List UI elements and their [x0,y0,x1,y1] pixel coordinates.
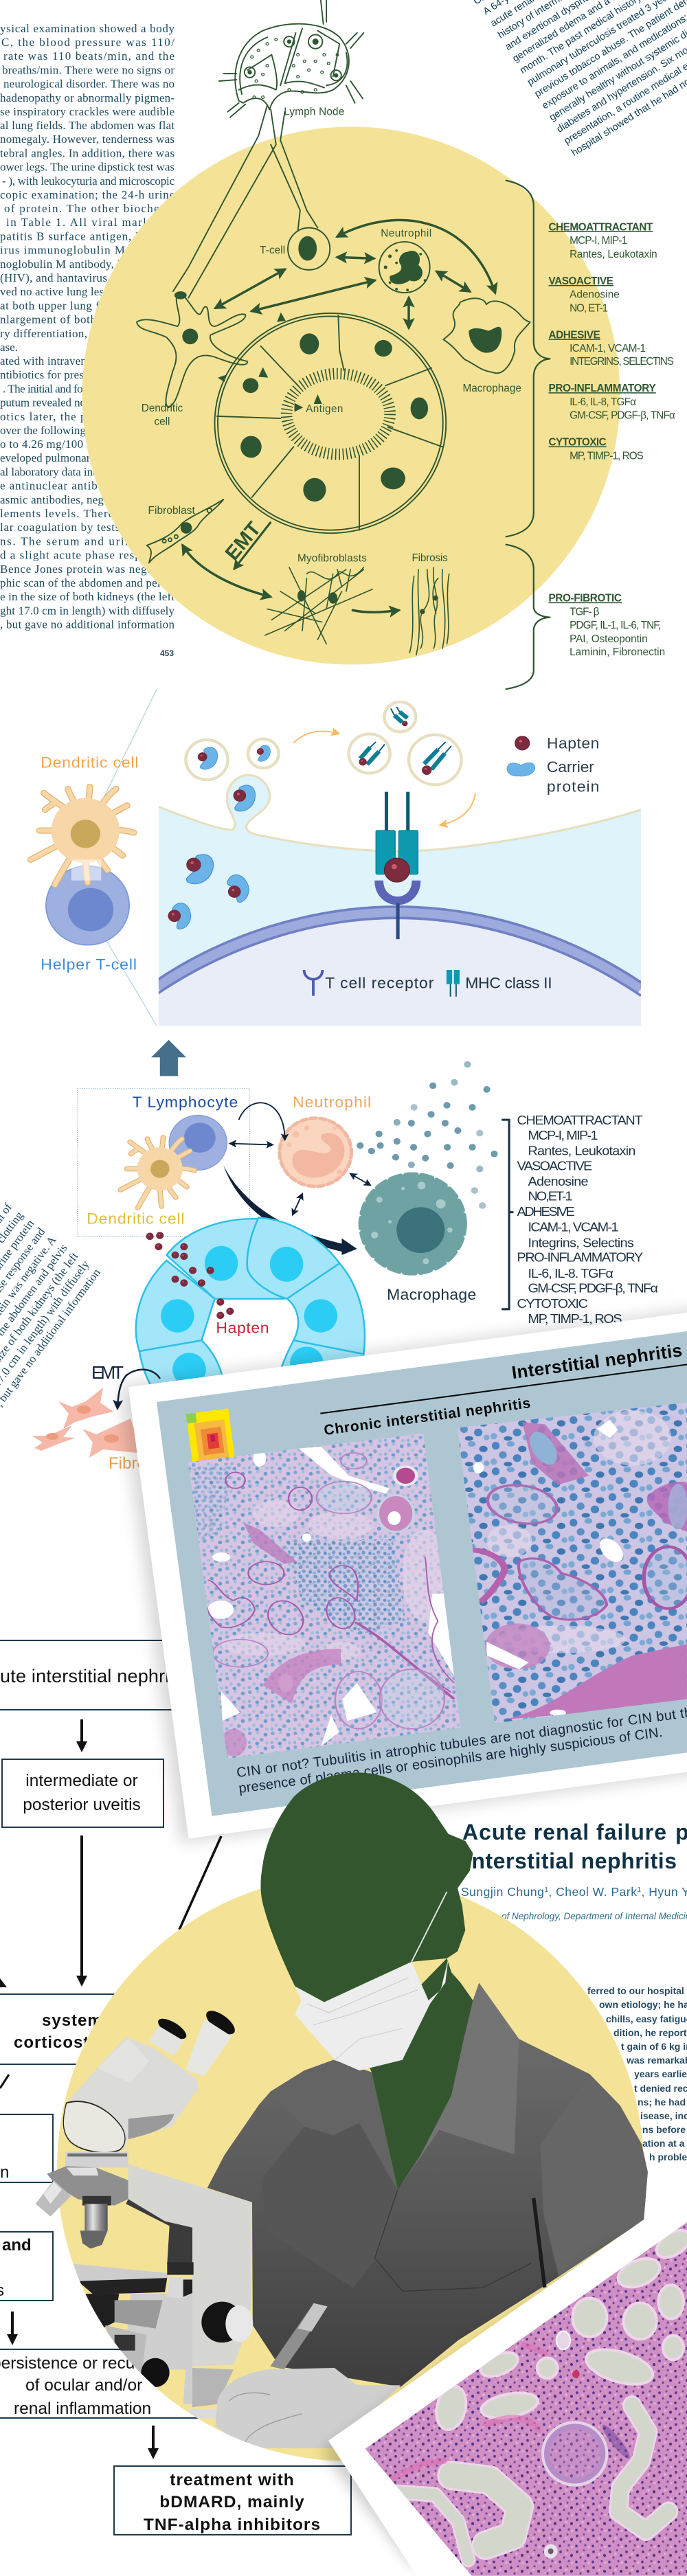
list: mediators [548,221,675,658]
white photo border [328,2189,687,2576]
list: mediators: Rantes, Leukotaxin [570,249,657,260]
flowchart: persistence or recurrence box: of ocular and/or [25,2376,142,2395]
text block: clinical case column, top left: ght 17.0 cm in length) with diffusely [0,605,174,617]
article: body text fragment: ns; he had [638,2097,686,2108]
text block: clinical case column, top left: ntibiotics for presumed [0,368,110,381]
head silhouette [260,1772,473,2002]
arrow: flow down 1 [76,1719,87,1752]
icon: microscope upper body [36,2006,328,2369]
icon: dendritic cell [137,291,247,407]
dense infiltrate [286,1539,405,1635]
diagram: hapten presentation panel [31,689,658,1403]
text block: clinical case column, top left: e in the size of both kidneys (the left [0,590,174,603]
bracket: mediators [502,1120,513,1309]
list: mediators: Adenosine [528,1175,589,1189]
article: body text fragment: ns before [642,2124,686,2135]
arrow: flow down 4 [148,2426,159,2459]
list: mediators: MCP-I, MIP-1 [528,1129,598,1143]
label and arrow: EMT: EMT [221,517,265,565]
heading underline [320,1362,687,1414]
yellow circle background, top diagram [82,126,620,665]
label: dendritic cell [142,403,183,428]
list: mediators: Rantes, Leukotaxin [528,1144,635,1158]
text block: clinical case column, top left: (HIV), and hantavirus [0,271,107,284]
list: mediators: TGF- β [570,606,600,618]
figure: lab worker [207,1772,648,2387]
legend: hapten and carrier protein: Carrier [547,759,594,776]
flowchart: intermediate or posterior uveitis box: intermediate or [25,1772,138,1790]
list: mediators: ADHESIVE [517,1206,575,1219]
icon: T lymphocyte [169,1115,227,1170]
text block: clinical case column, top left: al lung fields. The abdomen was flat [0,119,174,132]
icon: macrophage [361,1175,464,1273]
arrow: thick curved to macrophage [223,1166,357,1255]
eyepieces [149,2006,237,2076]
text block: clinical case column, top left: putum revealed no [0,396,86,409]
pen [270,2303,328,2369]
text block: clinical case column, top left: rate was 110 beats/min, and the [3,49,174,63]
text block: clinical case column, top left: otics later, the py [0,410,93,423]
page number: 453 [160,648,174,658]
label: hapten: Hapten [216,1320,269,1336]
list: mediators: Integrins, Selectins [528,1236,634,1250]
text block: clinical case column, top left: at both upper lung fields [0,300,124,312]
flowchart: persistence or recurrence box [0,2349,220,2418]
list: mediators: VASOACTIVE [548,275,613,287]
label: T lymphocyte: T Lymphocyte [133,1094,238,1111]
hand [215,2368,401,2448]
label: fibrosis: Fibrosis [412,552,448,564]
icon: microscope stage and base [74,2264,234,2419]
extracellular fluid [159,776,641,981]
flowchart: partial box with n: n [0,2163,9,2182]
T-cell membrane [157,912,641,988]
histology tissue [344,2211,687,2576]
text block: clinical case column, top left: neurological disorder. There was no [3,77,174,91]
label: dendritic cell small: Dendritic cell [87,1210,184,1227]
text block: clinical case column, top left: o to 4.26 mg/100 mL [0,438,103,451]
text block: clinical case column, top left [0,22,190,631]
text block: clinical case column, top left: lar coagulation by tests of [0,521,134,534]
flowchart: partial box with and: and [2,2236,32,2255]
flowchart: partial box with n [0,2114,53,2182]
text block: clinical case column, top left: eveloped pulmonary [0,451,96,464]
flowchart: systemic corticosteroids box [0,1994,206,2064]
article: title and authors: interstitial nephritis [465,1849,677,1873]
text block: clinical case column, top left: hadenopathy or abnormally pigmen- [0,91,174,104]
text block: clinical case column, top left: phic scan of the abdomen and pelvis [0,576,174,589]
list: mediators: INTEGRINS, SELECTINS [570,356,674,368]
curly brace: cytokine groups [506,181,550,536]
icon: renal tubule cross-section [215,313,446,533]
legend: T cell receptor and MHC class II [304,970,552,997]
flowchart: partial box with and [0,2232,53,2301]
text block: clinical case column, top left: breaths/min. There were no signs or [2,63,174,77]
arrows between cells [183,220,495,612]
small floating particles [357,1061,497,1209]
icon: lymph node [219,0,363,117]
zoom guide lines [72,689,157,1026]
arrow: flow down 2 [76,1835,87,1987]
list: mediators: IL-6, IL-8. TGFα [528,1267,613,1281]
text block: clinical case column, top left: ower legs. The urine dipstick test was [0,161,174,173]
text block: clinical case column, top left: , but gave no additional information [0,618,174,631]
article: title and authors: 1 [544,1886,548,1894]
list: mediators: NO, ET-1 [570,302,608,314]
text block: clinical case column, top left: nomegaly. However, tenderness was [0,133,174,146]
list: mediators: ICAM-1, VCAM-1 [528,1221,619,1234]
icon: helper T-cell [46,866,129,945]
list: mediators: PRO-INFLAMMATORY [548,383,656,394]
legend: hapten and carrier protein [507,735,599,795]
text block: clinical case column, top left: C, the blood pressure was 110/ [1,36,174,49]
MHC class II molecule [376,792,418,874]
list: mediators: MCP-I, MIP-1 [570,235,627,247]
dotted selection box [78,1089,250,1236]
text block: clinical case column, top left: - ), with leukocyturia and microscopic [2,174,174,188]
haptens near tubule [146,1232,234,1319]
vesicles [185,702,462,784]
label: EMT: EMT [91,1362,124,1383]
icon: macrophage [443,298,530,373]
histology image: left micrograph [188,1433,460,1759]
article: title and authors: Acute renal failure [462,1820,666,1844]
curly brace: pro-fibrotic [506,545,550,689]
text block: clinical case column, top left: of protein. The other biochemical [4,202,190,215]
membrane [159,775,641,851]
text block: clinical case column, top left: ns. The serum and urine [0,534,137,548]
label: dendritic cell: Dendritic [142,403,183,414]
list: mediators: PRO-INFLAMMATORY [517,1251,643,1265]
panel: kidney histology photograph [322,2189,687,2576]
list: mediators: PRO-FIBROTIC [548,593,622,605]
list: mediators: CYTOTOXIC [517,1297,588,1311]
heading: chronic interstitial nephritis: Chronic interstitial nephritis [323,1395,532,1438]
flowchart: intermediate or posterior uveitis box: posterior uveitis [23,1796,141,1814]
flowchart: treatment box: TNF-alpha inhibitors [144,2516,321,2534]
list: mediators: CYTOTOXIC [548,437,607,449]
slide shadow [120,1296,687,1842]
histology image: right micrograph [451,1399,687,1731]
text block: clinical case column, top left: Bence Jones protein was negative [0,563,172,576]
icon: neutrophil [280,1118,351,1186]
icon: heat-map legend [186,1408,236,1472]
text block: clinical case column, top left: . The initial and follow [3,382,103,396]
icon: fibroblasts [32,1388,137,1458]
icon: T-cell [288,228,330,270]
text block: clinical case column, top left: irus immunoglobulin M [0,243,125,257]
label: antigen: Antigen [306,403,343,415]
label: dendritic cell: cell [154,416,170,428]
slide background [157,1315,687,1816]
text block: clinical case column, top left: in Table 1. All viral markers [6,216,166,229]
label: fibroblast: Fibroblast [148,505,196,517]
list: mediators: PDGF, IL-1, IL-6, TNF, [570,620,661,631]
legend: hapten and carrier protein: Hapten [547,735,599,752]
flowchart: acute interstitial nephritis box [0,1640,188,1710]
flowchart: intermediate or posterior uveitis box [2,1759,164,1827]
text block: clinical case column, top left: ry differentiation, [0,327,87,340]
label: lymph node: Lymph Node [284,106,344,118]
text block: rotated case report, top right [472,0,687,160]
vesicle contents [198,707,451,775]
list: mediators: Laminin, Fibronectin [570,646,665,658]
icon: fibrosis [409,567,449,655]
article: body text fragment [587,1985,687,2162]
label: myofibroblasts: Myofibroblasts [297,553,367,565]
legend: T cell receptor and MHC class II: MHC class II [465,975,552,992]
list: mediators: MP, TIMP-1, ROS [570,450,644,462]
label: dendritic cell: Dendritic cell [41,754,139,771]
list: mediators: MP, TIMP-1, ROS [528,1312,622,1326]
text block: clinical case column, top left: over the following days [0,424,110,437]
arrow: diagonal line to circle [179,1836,221,1930]
icon: myofibroblasts [265,567,372,644]
article: title and authors: Sungjin Chung [461,1885,544,1899]
vessels between node and cells [173,105,317,298]
text block: clinical case column, top left: al laboratory data included [0,466,124,478]
list: mediators: GM-CSF, PDGF-β, TNFα [570,410,675,422]
hapten bound [385,858,409,882]
text block: clinical case column, top left: copic examination; the 24-h urine [0,188,174,201]
text block: clinical case column, top left: ved no active lung lesions [0,285,124,298]
slide card [128,1296,687,1838]
list: mediators: IL-6, IL-8, TGFα [570,396,636,408]
panel: interstitial nephritis slide [120,1294,687,1842]
binocular head [63,2037,198,2152]
text block: clinical case column, top left: ated with intravenous [0,354,103,368]
arrows: immune interactions [230,1103,370,1214]
text block: clinical case column, top left: noglobulin M antibody, human [0,258,150,271]
list: mediators: Adenosine [570,289,620,301]
label: macrophage: Macrophage [462,383,521,394]
flowchart: persistence or recurrence box: renal inflammation [14,2399,151,2418]
article: body text fragment: ation at a [642,2138,685,2149]
icon: fibroblast [147,499,223,563]
label: fibroblast: Fibroblast [109,1454,181,1473]
text block: clinical case column, top left: d a slight acute phase response [0,548,165,562]
text block: clinical case column, top left: e antinuclear antibody [0,479,117,492]
heading: interstitial nephritis: Interstitial nephritis [510,1340,684,1383]
T-cell body [159,919,641,1026]
text block: clinical case column, top left: patitis B surface antigen, hepatitis [0,229,180,243]
arrow: upward block arrow [151,1040,186,1076]
arrow: diagonal fragment [0,1978,9,2088]
synapse highlight [71,859,101,881]
icon: neutrophil [379,242,430,293]
list: mediators: ADHESIVE [548,329,600,341]
icon: epithelial tubule cells [136,1218,365,1403]
label: macrophage: Macrophage [387,1286,476,1303]
list: mediators: VASOACTIVE [517,1160,592,1173]
flowchart: treatment box: bDMARD, mainly [159,2493,305,2511]
diagram: immune cell line art [137,0,675,689]
microscope arm [126,2165,252,2366]
list: mediators: GM-CSF, PDGF-β, TNFα [528,1282,658,1296]
article: title and authors [461,1820,687,1921]
list: mediators [517,1114,658,1326]
caption: presence of plasma cells or eosinophils are highly suspicious of CIN. [238,1725,664,1796]
arrow: flow down 3 [7,2312,18,2345]
list: mediators: NO,ET-1 [528,1190,573,1204]
carrier proteins free [168,852,256,930]
article: title and authors: , Cheol W. Park [548,1885,637,1899]
text block: clinical case column, top left: se inspiratory crackles were audible [0,105,174,118]
text block: clinical case column, top left: lements levels. There was [0,507,137,520]
panel: synapse close-up [157,775,641,1026]
icon: dendritic cell small [120,1138,194,1208]
legend: hapten and carrier protein: protein [547,778,599,795]
label: T-cell: T-cell [260,245,285,256]
face mask [295,1892,449,2070]
T cell receptor [379,881,416,939]
nosepiece and objectives [36,2152,128,2248]
label: neutrophil: Neutrophil [381,227,431,239]
flowchart: systemic corticosteroids box: corticosteroids [14,2033,143,2052]
shirt [207,1983,648,2387]
neck [365,1958,473,2190]
arrow: EMT curved [117,1370,160,1408]
legend: T cell receptor and MHC class II: T cell receptor [325,975,434,992]
article: title and authors: 1 [637,1886,642,1894]
icon: dendritic cell [31,787,134,885]
vesicle: entering [234,785,256,811]
text block: clinical case column, top left: asmic antibodies, negative [0,493,127,506]
text block: clinical case column, top left: ysical examination showed a body [0,22,174,35]
list: mediators: CHEMOATTRACTANT [548,221,653,233]
label: neutrophil: Neutrophil [293,1094,371,1111]
yellow circle background, lab worker [57,1875,644,2461]
flowchart: treatment box [114,2466,351,2535]
focus knob [201,2302,253,2342]
text block: clinical case column, top left: tebral angles. In addition, there was [0,147,174,159]
list: mediators: CHEMOATTRACTANT [517,1114,643,1128]
arrow: orange curved lower [440,793,475,825]
list: mediators: ICAM-1, VCAM-1 [570,343,646,354]
text block: clinical case column, top left: ase. [0,341,18,354]
text block: clinical case column, top left: nlargement of both [0,313,96,326]
text block: rotated case text, mid left [0,1200,103,1442]
flowchart: acute interstitial nephritis box: ute interstitial nephritis [0,1666,188,1686]
photo shadow [322,2239,618,2566]
flowchart: treatment box: treatment with [170,2471,295,2489]
arrow: orange curved upper [293,732,339,743]
label: helper T-cell: Helper T-cell [41,956,137,973]
list: mediators: PAI, Osteopontin [570,633,648,645]
flowchart: systemic corticosteroids box: systemic [42,2011,118,2030]
